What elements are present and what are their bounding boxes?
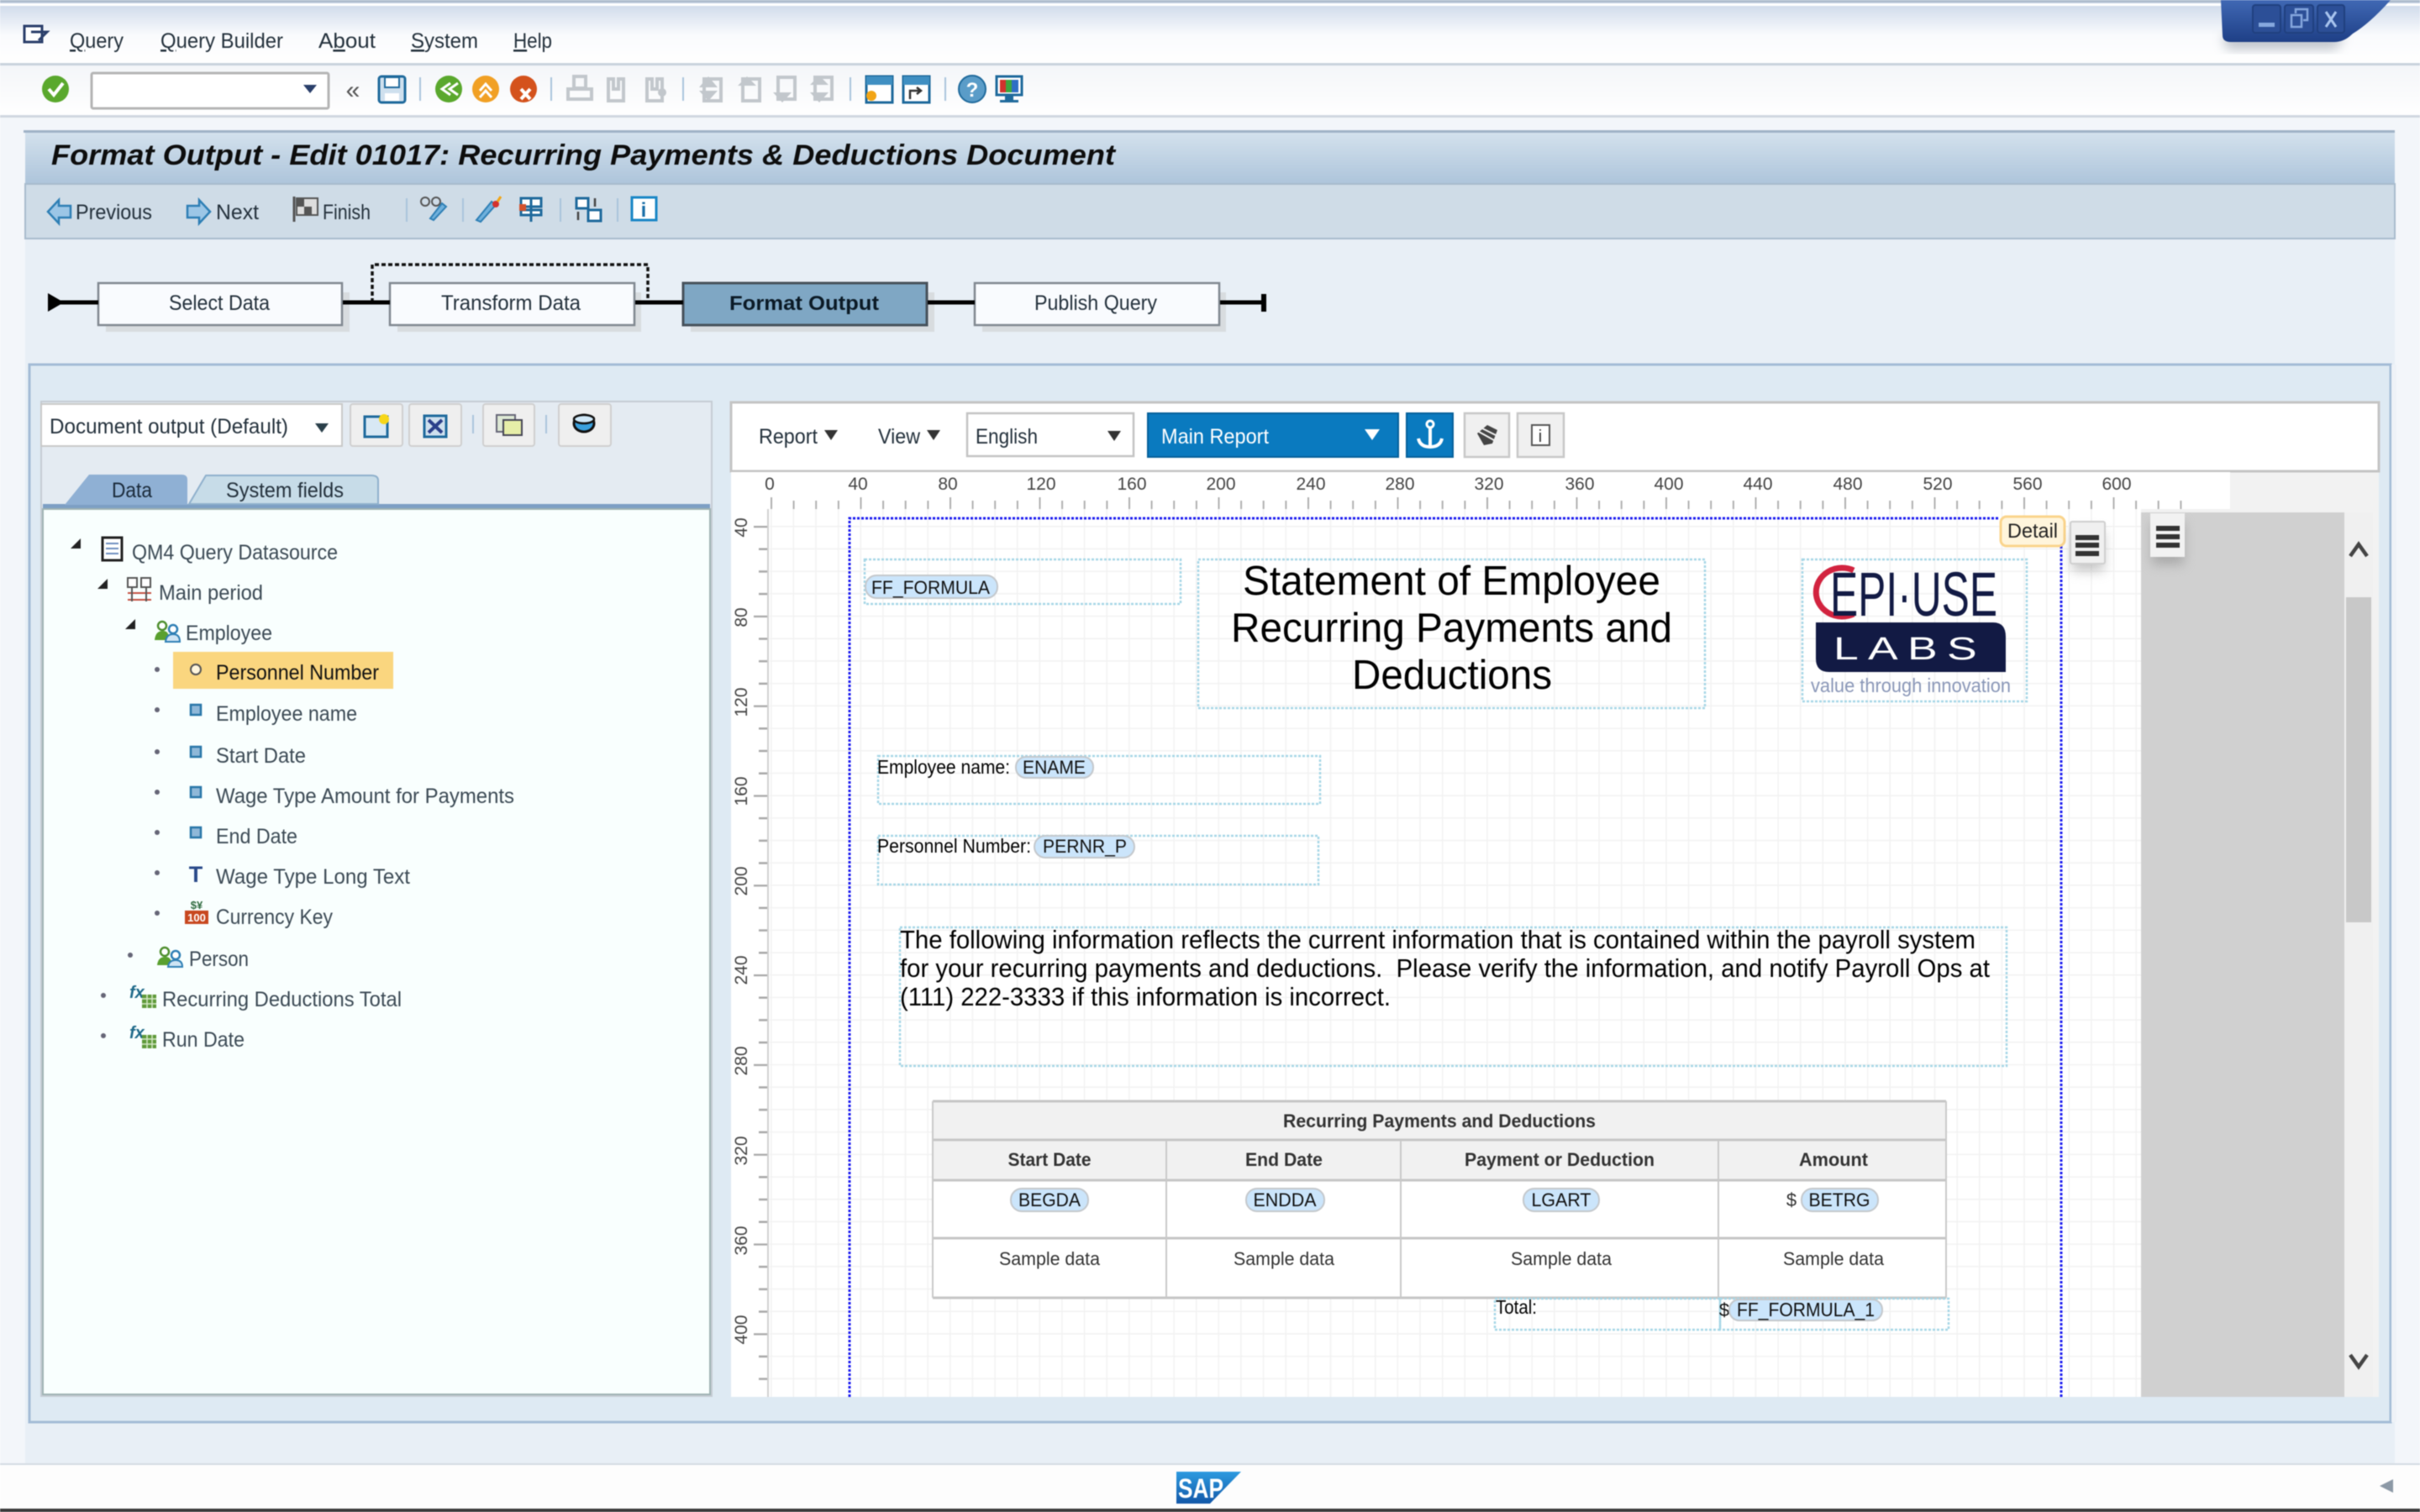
icon: monitor [997,76,1022,102]
canvas grid [770,509,2141,1397]
icon: system menu [24,26,47,42]
output type dropdown: Document output (Default) [50,415,288,438]
logo: EPI-USE Labs: value through innovation [1811,675,2011,696]
status bar [0,1463,2420,1512]
vertical ruler: 120 [732,687,751,717]
field row: BEGDA [1018,1189,1081,1210]
collapse arrows: « [346,76,360,104]
icon: scroll up [2350,544,2367,556]
sample row: Sample data [1511,1248,1612,1269]
menu: Query: Query [70,29,124,53]
tree node: Employee name [155,702,357,726]
disabled toolbar icons [568,76,832,102]
icon: glasses pencil [421,197,446,220]
icon: swap [576,198,601,221]
button: anchor [1407,413,1453,457]
vertical ruler: 400 [732,1315,751,1345]
text block: verification notice: for your recurring payments and deductions. Please verify the information, and notify Payroll Ops at [900,953,1990,983]
step: Format Output: Format Output [729,292,879,315]
menu: System: System [411,29,478,53]
icon: info: i [641,199,646,222]
icon: stack [519,198,541,222]
tree node: Run Date: Run Date [162,1028,245,1052]
horizontal ruler: 40 [848,475,868,494]
tree node: Wage Type Long Text: Wage Type Long Text [216,865,410,889]
table title: Recurring Payments and Deductions [1283,1110,1596,1131]
field: total: $ [1719,1299,1729,1320]
sample row [999,1248,1885,1269]
icon: scroll down [2350,1355,2367,1367]
horizontal ruler: 480 [1833,475,1863,494]
horizontal ruler: 240 [1296,475,1326,494]
section handle [2070,522,2105,571]
document title [1198,559,1705,708]
step: Select Data [98,283,350,332]
icon: shortcut [903,76,929,102]
vertical ruler: 200 [732,866,751,896]
margin handle [2150,513,2185,564]
language dropdown [967,413,1134,456]
field: personnel number: Personnel Number: [877,835,1031,857]
dashed loop [372,265,648,302]
tree node: Run Date [101,1024,245,1052]
menu: Help: Help [513,29,552,53]
button: info [1518,413,1564,457]
vertical ruler: 360 [732,1226,751,1256]
vertical ruler: 80 [732,607,751,627]
standard toolbar [0,66,2420,118]
step: Format Output [683,283,934,332]
horizontal ruler: 400 [1654,475,1684,494]
panel: data source sidebar [41,402,712,1396]
column headers: Amount [1799,1149,1869,1170]
report dropdown [1148,413,1398,457]
tree node selected: Personnel Number [155,652,393,689]
tree node: QM4 Query Datasource: QM4 Query Datasource [132,541,338,564]
tree node: Currency Key: 100 [187,911,206,924]
horizontal ruler: 600 [2102,475,2132,494]
step: Publish Query [975,283,1226,332]
tab strip line [43,504,710,509]
icon: finish flag [294,197,318,222]
button: copy window [483,404,534,446]
output type dropdown [41,404,342,446]
tree node: Wage Type Amount for Payments: Wage Type Amount for Payments [216,785,514,808]
tree node: Recurring Deductions Total: fx [129,984,145,1002]
vertical ruler: 280 [732,1046,751,1076]
tab: System fields: System fields [226,479,344,502]
sample row: Sample data [1783,1248,1885,1269]
horizontal ruler: 160 [1117,475,1147,494]
tree node: Person: Person [189,948,249,971]
tab: Data: Data [112,479,152,502]
field row: $ [1786,1189,1797,1210]
icon: enter check [42,76,69,102]
tree node: Employee [125,619,272,645]
logo: EPI-USE Labs: LABS [1833,632,1986,667]
horizontal ruler: 560 [2012,475,2043,494]
step: Transform Data [390,283,641,332]
report dropdown: Main Report [1161,425,1269,449]
next button: Next [216,201,259,224]
tree node: Main period [97,578,263,605]
icon: previous arrow [48,200,71,223]
icon: next arrow [187,200,210,223]
page title: Format Output - Edit 01017: Recurring Payments & Deductions Document [51,139,1117,171]
logo: EPI-USE Labs: EPI·USE [1830,559,1997,629]
vertical ruler: 40 [732,517,751,538]
tree node: Employee name: Employee name [216,702,357,726]
icon: exit orange [472,76,499,102]
button: info: i [1539,428,1542,446]
window controls [2221,0,2391,49]
step: Transform Data: Transform Data [441,291,581,315]
sample row: Sample data [999,1248,1101,1269]
icon: magic wand [476,197,501,222]
field: FF_FORMULA [865,559,1181,604]
tree node: Recurring Deductions Total: Recurring Deductions Total [162,988,402,1011]
language dropdown: English [976,425,1038,449]
field row: ENDDA [1254,1189,1317,1210]
text block: verification notice: The following information reflects the current information that is contained within the payroll system [900,925,1975,954]
vertical ruler: 240 [732,955,751,985]
horizontal ruler [731,472,2230,509]
text block: verification notice [900,925,2007,1066]
field row [1011,1189,1878,1211]
field: employee name [877,756,1320,804]
title bar [24,130,2395,183]
tree node: Run Date: fx [129,1024,145,1042]
tree node: Recurring Deductions Total [101,984,402,1011]
field: total: FF_FORMULA_1 [1737,1299,1875,1320]
logo: SAP: SAP [1178,1473,1223,1504]
tree node: Wage Type Long Text [155,862,410,889]
menu: Query Builder: Query Builder [160,29,283,53]
process flow [48,265,1266,332]
horizontal ruler: 0 [765,475,775,494]
column headers [1008,1149,1869,1170]
content background [25,239,2395,1464]
tab: System fields [189,475,378,504]
step: Select Data: Select Data [169,291,270,315]
button: delete [409,404,461,446]
field: total [1495,1296,1949,1330]
icon: help [959,76,986,102]
menu bar [0,0,2420,66]
designer toolbar [731,402,2379,471]
icon: cancel red [510,76,537,102]
gray margin area [2141,512,2344,1397]
horizontal ruler: 360 [1565,475,1595,494]
horizontal ruler: 280 [1385,475,1415,494]
icon: info [632,197,656,222]
field: personnel number [877,835,1318,885]
tree node: Main period: Main period [159,581,263,605]
field row: LGART [1531,1189,1591,1210]
column headers: Start Date [1008,1149,1091,1170]
column headers: Payment or Deduction [1465,1149,1655,1170]
icon: back green [435,76,462,102]
field: employee name: ENAME [1023,757,1086,778]
tree node: QM4 Query Datasource [71,538,338,564]
tree node selected: Personnel Number: Personnel Number [216,661,379,685]
horizontal ruler: 320 [1474,475,1504,494]
tree node: Person [128,948,249,971]
tree node: Start Date [155,744,306,768]
button: new [350,404,402,446]
icon: status triangle [2380,1479,2393,1493]
field row: BETRG [1808,1189,1870,1210]
detail tag: Detail [2007,520,2058,543]
table: recurring payments and deductions [933,1101,1946,1298]
command field [92,73,329,108]
field: employee name: Employee name: [877,756,1010,778]
button: layers [1465,413,1509,457]
connector lines [48,293,1266,312]
horizontal ruler: 520 [1923,475,1953,494]
tree node: Employee: Employee [186,622,272,645]
horizontal ruler: 120 [1026,475,1056,494]
view menu: View [878,425,921,449]
icon: new session [866,76,892,102]
application toolbar [25,184,2395,239]
scrollbar [2344,512,2373,1397]
sample row: Sample data [1234,1248,1335,1269]
tree node: Currency Key: Currency Key [216,906,333,929]
previous button: Previous [76,201,152,224]
panel: report designer [731,402,2379,1397]
panel: data tree [43,509,710,1394]
tree node: Wage Type Long Text: T [189,862,203,887]
field: FF_FORMULA: FF_FORMULA [871,577,990,598]
vertical ruler: 320 [732,1136,751,1166]
main panel [29,365,2396,1422]
text block: verification notice: (111) 222-3333 if this information is incorrect. [900,982,1391,1011]
field: total: Total: [1496,1296,1537,1318]
column headers: End Date [1245,1149,1323,1170]
tree node: End Date: End Date [216,825,297,848]
vertical ruler: 160 [732,776,751,806]
detail tag [2001,517,2065,546]
report menu: Report [759,425,818,449]
horizontal ruler: 440 [1743,475,1773,494]
tree node: Currency Key [155,899,333,929]
document title: Recurring Payments and [1231,606,1672,651]
step: Publish Query: Publish Query [1034,291,1157,315]
horizontal ruler: 200 [1206,475,1236,494]
tree node: Start Date: Start Date [216,744,306,768]
tree node: End Date [155,825,297,848]
document title: Deductions [1352,653,1552,698]
logo: EPI-USE Labs [1802,559,2027,701]
vertical ruler [731,509,770,1397]
document title: Statement of Employee [1243,559,1660,604]
report page outline [850,518,2061,1397]
button: database [559,404,611,446]
tree node: Currency Key: $¥ [191,899,203,911]
menu: About: About [318,29,376,53]
horizontal ruler: 80 [938,475,958,494]
field: personnel number: PERNR_P [1043,836,1127,857]
tab: Data [65,475,187,505]
icon: help: ? [966,79,978,102]
icon: save [379,76,405,102]
finish button: Finish [323,201,371,224]
